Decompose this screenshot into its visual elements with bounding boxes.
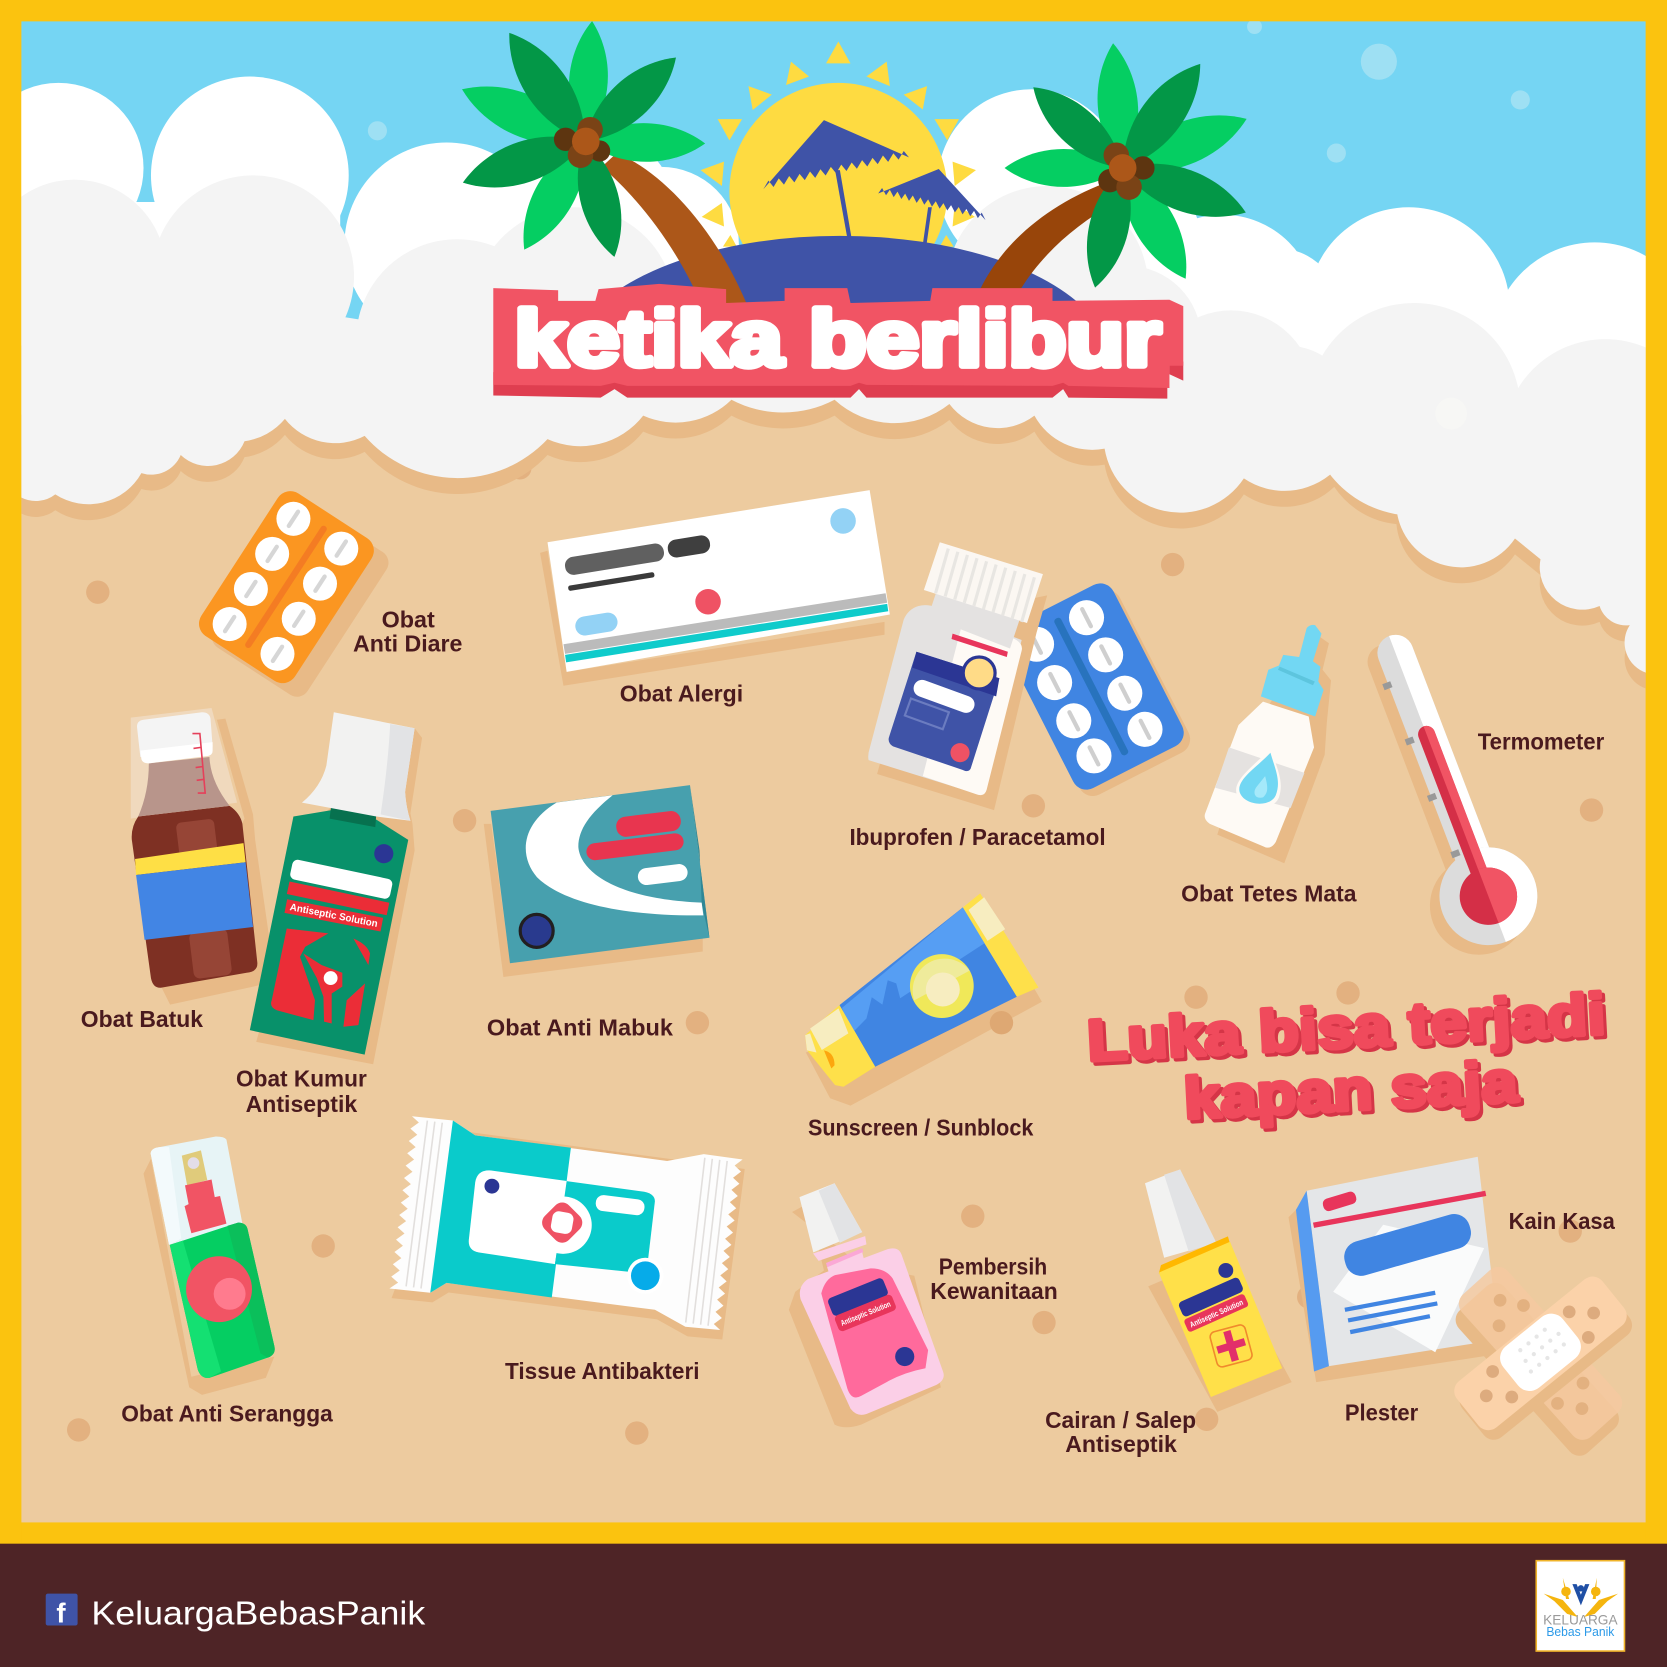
item: thermometer: [1334, 619, 1552, 969]
clouds: grey front layer: [0, 175, 1667, 673]
item: gauze box: [1289, 1157, 1510, 1382]
callout: Luka bisa terjadi kapan saja: Luka bisa terjadi: [1085, 982, 1607, 1074]
footer text: facebook handle: KeluargaBebasPanik: [91, 1594, 426, 1631]
label: Sunscreen / Sunblock: Sunscreen / Sunblock: [808, 1114, 1034, 1140]
label: Cairan / Salep Antiseptik: Cairan / Salep: [1045, 1407, 1196, 1433]
logo: Keluarga Bebas Panik: Bebas Panik: [1546, 1624, 1615, 1639]
label: Pembersih Kewanitaan: Kewanitaan: [930, 1278, 1058, 1304]
label: Obat Anti Diare: [353, 606, 462, 657]
item: allergy medicine box: [540, 490, 890, 686]
item: antiseptic ointment tube: [1145, 1169, 1292, 1412]
item: feminine wash bottle: [789, 1183, 944, 1427]
callout: Luka bisa terjadi kapan saja: kapan saja: [1185, 1052, 1523, 1135]
item: antiseptic mouthwash bottle: [250, 712, 422, 1064]
label: Ibuprofen / Paracetamol: Ibuprofen / Paracetamol: [849, 824, 1106, 850]
label: Obat Alergi: Obat Alergi: [620, 681, 743, 707]
callout: Luka bisa terjadi kapan saja: kapan saja: [1182, 1049, 1519, 1132]
footer bar: [0, 1544, 1667, 1667]
item: antibacterial tissue pack: [389, 1116, 745, 1340]
item: eye drop bottle: [1205, 625, 1331, 863]
label: Obat Kumur Antiseptik: Obat Kumur: [236, 1066, 367, 1092]
label: Obat Batuk: Obat Batuk: [81, 1006, 204, 1032]
item: sunscreen tube: [805, 893, 1042, 1106]
item: orange blister pack, anti diarrhoea: [193, 485, 393, 702]
icon: facebook: f: [56, 1597, 66, 1628]
label: Obat Kumur Antiseptik: Antiseptik: [246, 1091, 358, 1117]
logo: Keluarga Bebas Panik: [1536, 1561, 1624, 1651]
item: cough syrup bottle: [131, 708, 274, 1005]
label: Obat Anti Serangga: Obat Anti Serangga: [121, 1400, 334, 1426]
label: Obat Anti Mabuk: Obat Anti Mabuk: [487, 1014, 674, 1040]
label: Termometer: Termometer: [1478, 729, 1604, 755]
item: blue blister pack: [998, 578, 1195, 801]
illustration: island: [586, 236, 1094, 319]
icon: facebook: [46, 1594, 78, 1628]
item: adhesive bandage: [1449, 1262, 1637, 1461]
label: Tissue Antibakteri: Tissue Antibakteri: [505, 1358, 700, 1384]
callout: Luka bisa terjadi kapan saja: [1085, 982, 1613, 1140]
label: Plester: Plester: [1345, 1399, 1418, 1425]
illustration: right palm tree: [980, 42, 1255, 292]
illustration: sun: [701, 41, 976, 301]
item: motion sickness box: [484, 785, 709, 977]
label: Pembersih Kewanitaan: Pembersih: [939, 1254, 1047, 1280]
label: Pembersih Kewanitaan: [930, 1254, 1058, 1304]
item: ibuprofen bottle: [868, 542, 1047, 810]
item: antiseptic ointment tube: Antiseptic Solution: [1188, 1298, 1245, 1329]
illustration: big beach umbrella: [763, 120, 909, 238]
clouds: white back layer: [0, 77, 1667, 449]
item: antiseptic mouthwash bottle: Antiseptic Solution: [289, 902, 379, 930]
label: Obat Kumur Antiseptik: [236, 1066, 367, 1117]
cloud shadow on sand: [21, 335, 1647, 689]
title banner: [493, 284, 1183, 399]
label: Obat Tetes Mata: Obat Tetes Mata: [1181, 881, 1358, 907]
sand spots: [67, 456, 1603, 1445]
logo: Keluarga Bebas Panik: KELUARGA: [1543, 1611, 1618, 1627]
sky: [21, 21, 1646, 447]
label: Obat Anti Diare: Obat: [382, 606, 435, 632]
sky bubbles: [368, 19, 1530, 163]
item: feminine wash bottle: Antiseptic Solution: [839, 1299, 892, 1328]
illustration: small beach umbrella: [878, 169, 986, 245]
sand ground: [21, 393, 1646, 1522]
label: Cairan / Salep Antiseptik: [1045, 1407, 1196, 1457]
callout: Luka bisa terjadi kapan saja: Luka bisa terjadi: [1089, 985, 1610, 1077]
label: Cairan / Salep Antiseptik: Antiseptik: [1065, 1431, 1178, 1457]
item: insect spray: [144, 1136, 275, 1395]
label: Obat Anti Diare: Anti Diare: [353, 631, 462, 657]
label: Kain Kasa: Kain Kasa: [1509, 1208, 1616, 1234]
illustration: left palm tree: [454, 20, 746, 303]
title text: ketika berlibur: [515, 295, 1161, 383]
